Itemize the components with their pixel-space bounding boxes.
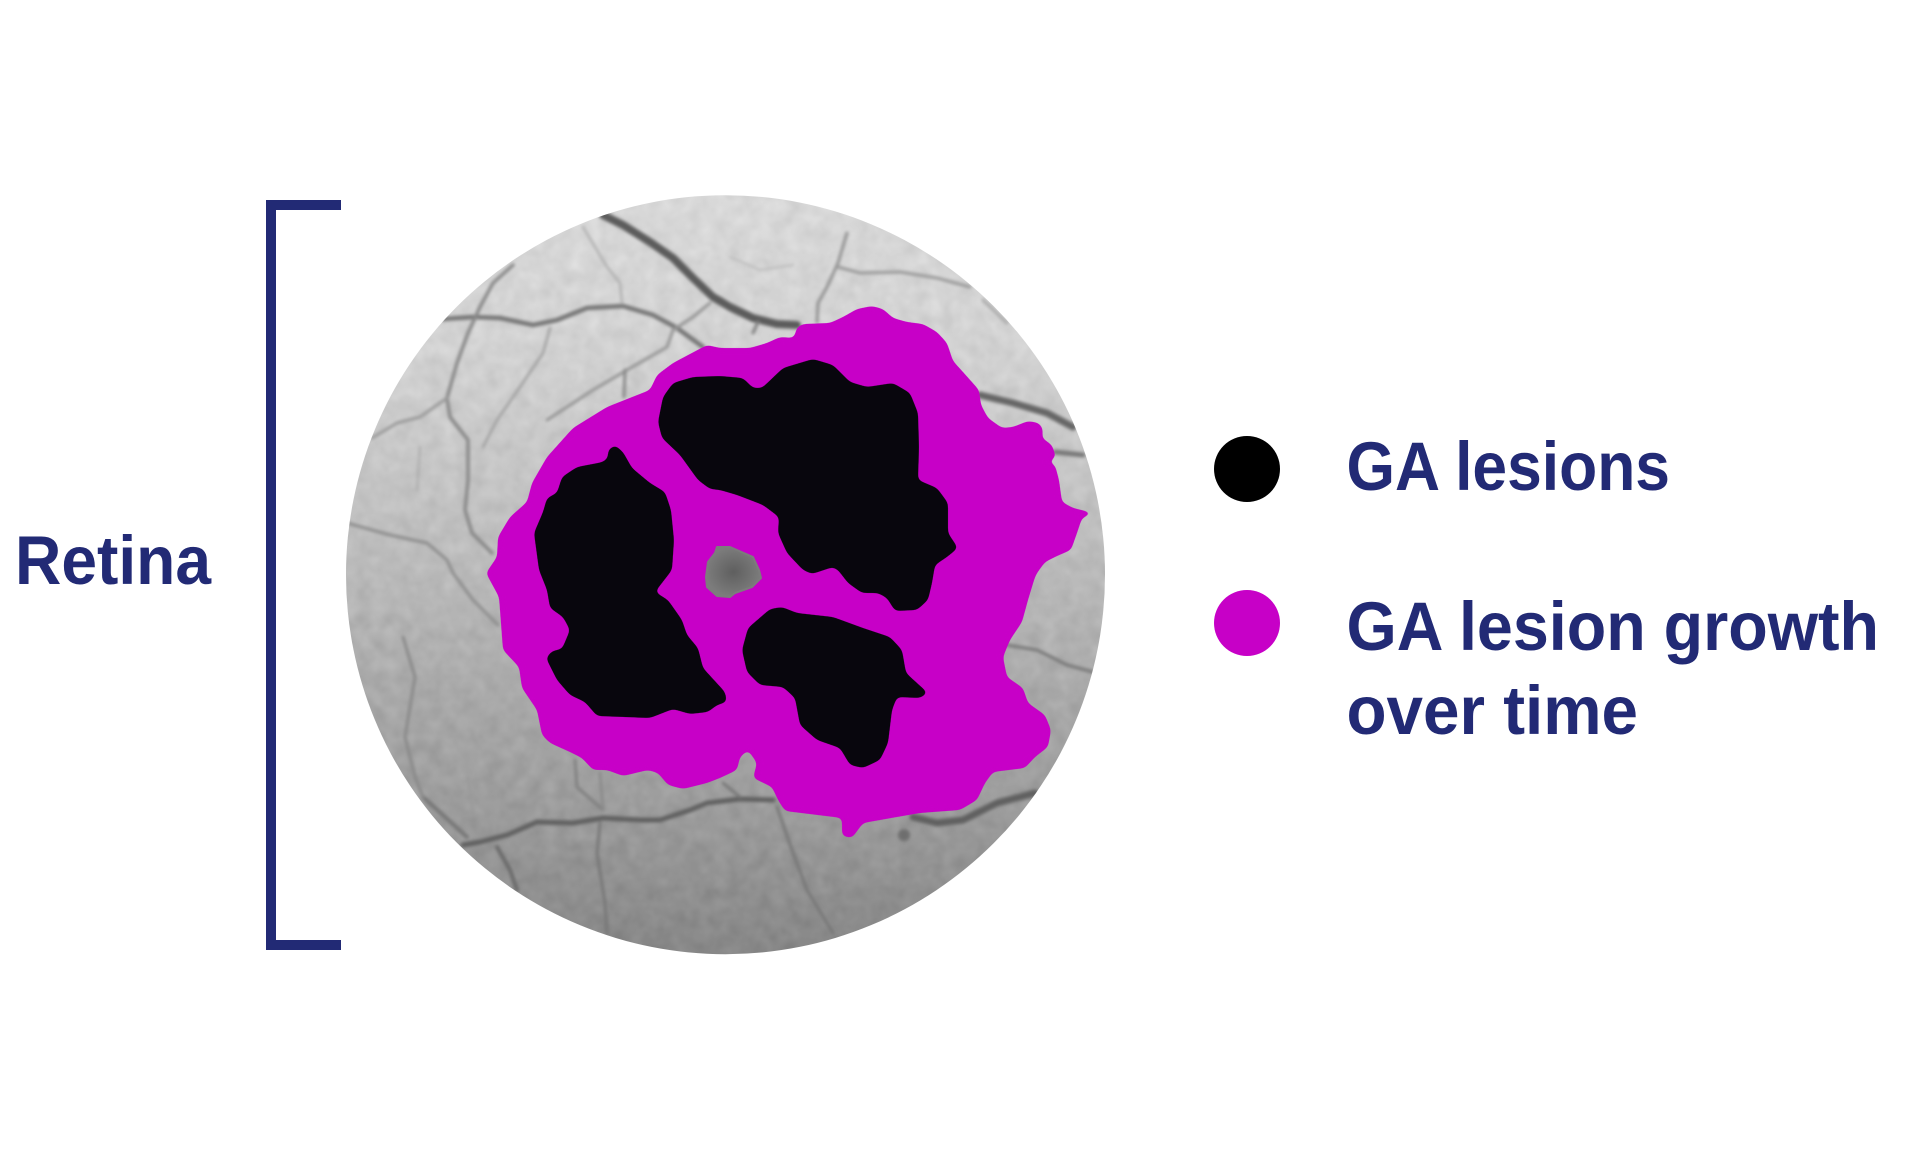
GA lesion: left (534, 445, 727, 718)
legend label: GA lesion growth over time: over time (1346, 672, 1638, 749)
infographic (19, 195, 1875, 954)
retina label: Retina (15, 522, 212, 599)
retina photo background (340, 190, 1112, 962)
GA lesion growth area (486, 306, 1094, 838)
legend label: GA lesions: GA lesions (1346, 428, 1670, 505)
fovea (706, 547, 761, 597)
legend swatch: GA lesion growth (1214, 590, 1280, 656)
GA lesion: upper right (658, 359, 958, 611)
legend label: GA lesion growth over time (1346, 588, 1879, 749)
GA lesion: bottom (742, 607, 928, 768)
legend (1214, 428, 1879, 749)
legend label: GA lesion growth over time: GA lesion growth (1346, 588, 1879, 665)
legend swatch: GA lesions (1214, 436, 1280, 502)
bracket (271, 205, 341, 945)
retina diagram (340, 190, 1112, 962)
